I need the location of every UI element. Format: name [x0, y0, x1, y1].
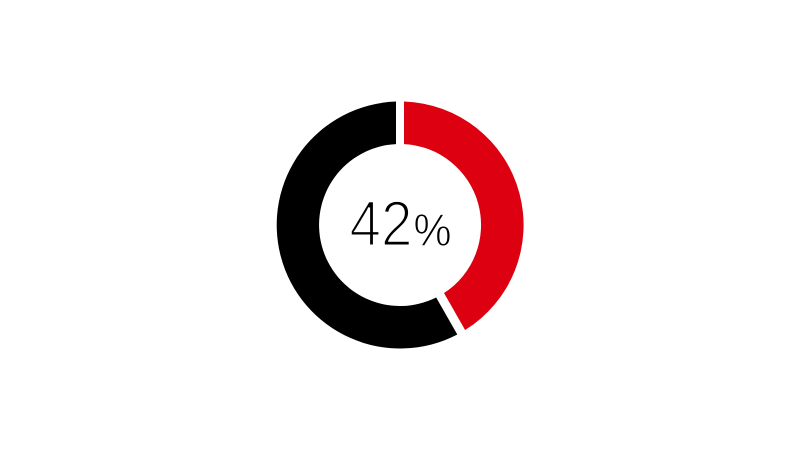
center value label: [350, 188, 452, 260]
value: 42: 42: [350, 188, 412, 260]
donut chart: [277, 102, 524, 348]
segment: 58% black: [277, 102, 457, 348]
segment: 42% red: [404, 102, 524, 330]
unit: percent: %: [414, 204, 452, 256]
